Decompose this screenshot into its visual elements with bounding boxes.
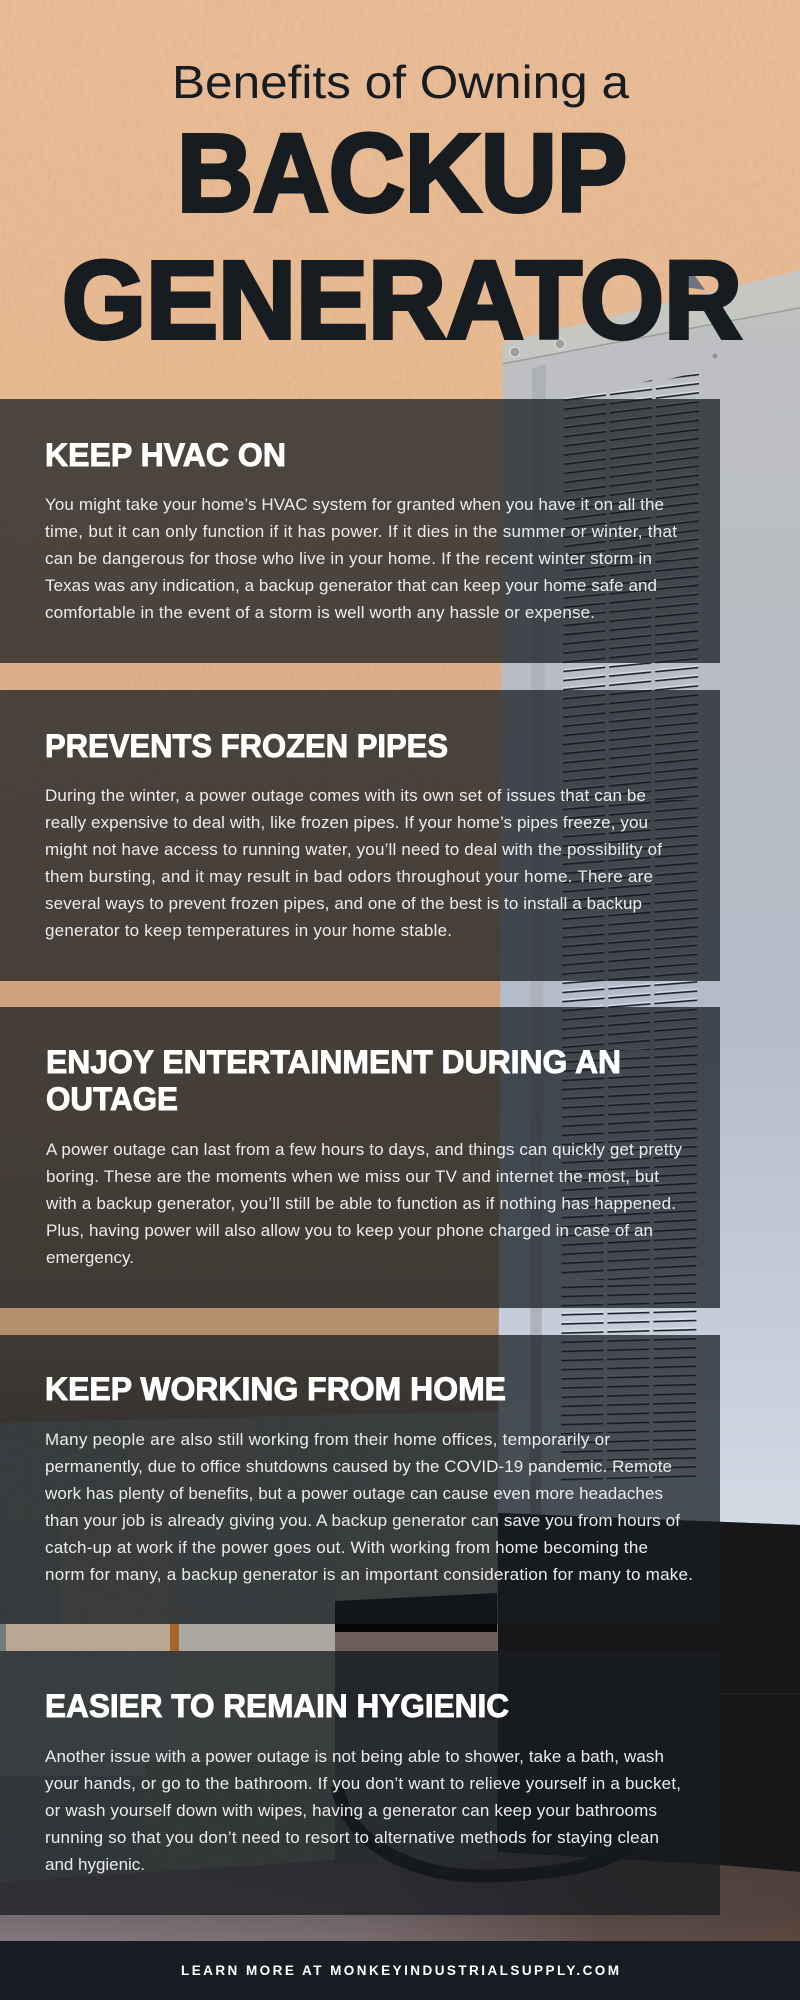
background: black hose [337, 1786, 632, 1876]
heading: OUTAGE [46, 1081, 178, 1117]
text block: with a backup generator, you’ll still be able to function as if nothing has happened. [45, 1194, 676, 1213]
title line: backup: BACKUP [177, 112, 627, 235]
background: stucco wall [0, 0, 800, 1440]
text block: Texas was any indication, a backup generator that can keep your home safe and [45, 576, 657, 595]
text block: norm for many, a backup generator is an important consideration for many to make. [45, 1565, 693, 1584]
text block: catch-up at work if the power goes out. With working from home becoming the [45, 1538, 648, 1557]
background: ground [0, 1720, 800, 1945]
text block: comfortable in the event of a storm is well worth any hassle or expense. [45, 603, 595, 622]
text block: several ways to prevent frozen pipes, and one of the best is to install a backup [45, 894, 642, 913]
text block [45, 495, 677, 622]
text block: You might take your home’s HVAC system for granted when you have it on all the [45, 495, 664, 514]
title [62, 56, 742, 362]
panel: easier to remain hygienic [0, 1651, 720, 1915]
text block: or wash yourself down with wipes, having a generator can keep your bathrooms [45, 1801, 657, 1820]
text block: A power outage can last from a few hours to days, and things can quickly get pretty [46, 1140, 682, 1159]
heading: KEEP WORKING FROM HOME [45, 1371, 506, 1407]
text block: generator to keep temperatures in your home stable. [45, 921, 452, 940]
panel: enjoy entertainment during an outage [0, 1007, 720, 1308]
footer link text: LEARN MORE AT MONKEYINDUSTRIALSUPPLY.COM [181, 1963, 619, 1978]
footer bar [0, 1941, 800, 2000]
panel: keep HVAC on [0, 399, 720, 663]
text block: time, but it can only function if it has power. If it dies in the summer or winter, that [45, 522, 677, 541]
title line: generator: GENERATOR [62, 239, 742, 362]
heading [46, 1044, 621, 1117]
panel: prevents frozen pipes [0, 690, 720, 981]
background: stone wall base [0, 1411, 500, 1900]
text block: running so that you don’t need to resort to alternative methods for staying clean [45, 1828, 659, 1847]
text block: boring. These are the moments when we miss our TV and internet the most, but [46, 1167, 659, 1186]
panel: keep working from home [0, 1335, 720, 1624]
text block [45, 1140, 682, 1267]
text block: than your job is already giving you. A backup generator can save you from hours of [45, 1511, 680, 1530]
background: generator louver vents [555, 365, 705, 1490]
heading: PREVENTS FROZEN PIPES [45, 728, 448, 764]
text block: can be dangerous for those who live in your home. If the recent winter storm in [45, 549, 652, 568]
text block: Another issue with a power outage is not being able to shower, take a bath, wash [45, 1747, 664, 1766]
heading: EASIER TO REMAIN HYGIENIC [45, 1688, 509, 1724]
text block: emergency. [46, 1248, 134, 1267]
text block: Plus, having power will also allow you to keep your phone charged in case of an [46, 1221, 653, 1240]
icon: small screw [712, 354, 718, 358]
text block: your hands, or go to the bathroom. If you don’t want to relieve yourself in a bucket, [45, 1774, 681, 1793]
text block [44, 1430, 693, 1584]
text block: permanently, due to office shutdowns caused by the COVID-19 pandemic. Remote [45, 1457, 672, 1476]
text block: During the winter, a power outage comes with its own set of issues that can be [45, 786, 646, 805]
icon: lid bump [670, 274, 705, 290]
text block: them bursting, and it may result in bad odors throughout your home. There are [45, 867, 653, 886]
text block [45, 1747, 681, 1874]
exposed stone strip [0, 1624, 335, 1651]
text block: work has plenty of benefits, but a power outage can cause even more headaches [44, 1484, 663, 1503]
background: dark generator base [335, 1513, 800, 1872]
subtitle line: Benefits of Owning a [172, 56, 629, 108]
text block: really expensive to deal with, like frozen pipes. If your home’s pipes freeze, you [45, 813, 648, 832]
text block: and hygienic. [45, 1855, 145, 1874]
background: generator cabinet [498, 270, 800, 1525]
text block [45, 786, 662, 940]
icon: bolt right [555, 339, 565, 349]
heading: ENJOY ENTERTAINMENT DURING AN [46, 1044, 621, 1080]
icon: bolt left [510, 347, 520, 357]
heading: KEEP HVAC ON [45, 437, 286, 473]
text block: Many people are also still working from their home offices, temporarily or [45, 1430, 610, 1449]
text block: might not have access to running water, you’ll need to deal with the possibility of [45, 840, 662, 859]
